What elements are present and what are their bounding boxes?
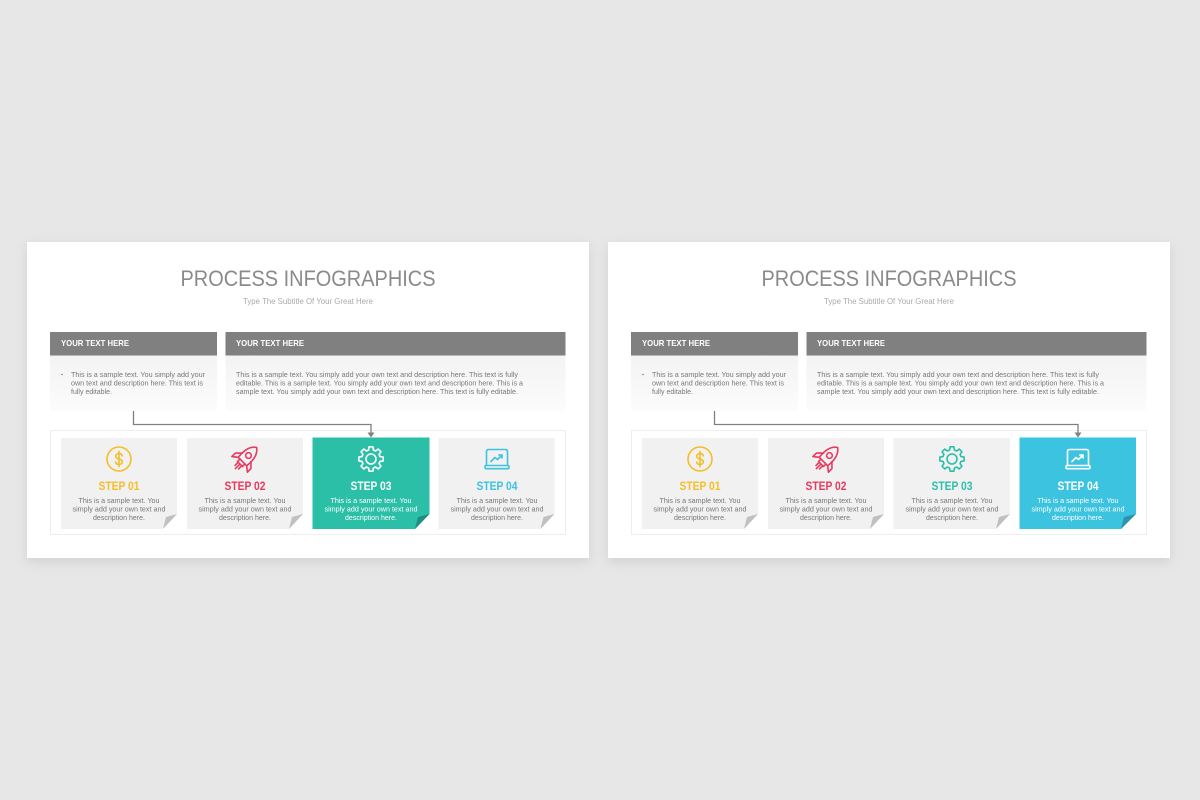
slide 1 left text box: own text and description here. This text is [71, 378, 203, 388]
slide 2 right text box: editable. This is a sample text. You simply add your own text and description here. This is a [817, 378, 1105, 388]
slide 2 right text box [806, 332, 1146, 411]
slide 1 background card [27, 242, 589, 558]
slide 1 step 03 card, highlighted: This is a sample text. You [330, 496, 412, 505]
icon: gear [940, 447, 964, 471]
slide 1 step 01 card: simply add your own text and [72, 504, 166, 514]
slide 1 connector arrow [134, 411, 374, 438]
slide 1 right text box: YOUR TEXT HERE [236, 338, 304, 348]
slide 1 steps frame [50, 430, 566, 534]
slide 2 step 03 card: This is a sample text. You [912, 496, 992, 505]
slide 2 step 02 card: simply add your own text and [780, 504, 872, 514]
slide 1 step 03 card, highlighted [312, 438, 430, 529]
slide 2 step 04 card, highlighted: This is a sample text. You [1038, 496, 1118, 505]
slide 1 subtitle: Type The Subtitle Of Your Great Here [243, 296, 373, 306]
slide 2 step 03 card: simply add your own text and [906, 504, 998, 514]
slide 2 step 04 card, highlighted: STEP 04 [1058, 481, 1099, 493]
slide 2 left text box: own text and description here. This text is [652, 378, 784, 388]
slide 1 step 01 card [61, 438, 177, 529]
slide 1 step 02 card: simply add your own text and [198, 504, 292, 514]
icon: dollar coin [107, 447, 131, 471]
slide 2 step 04 card, highlighted [1020, 438, 1136, 529]
slide 2 step 03 card [894, 438, 1010, 529]
slide 2 step 01 card: STEP 01 [680, 481, 721, 493]
slide 2 right text box: This is a sample text. You simply add your own text and description here. This text is fully [817, 370, 1099, 379]
icon: gear [359, 447, 383, 471]
slide 2 step 01 card [642, 438, 758, 529]
icon: rocket [809, 440, 845, 476]
slide 1 step 01 card: description here. [93, 513, 145, 522]
slide 1 step 04 card: This is a sample text. You [456, 496, 538, 505]
slide 2 left text box: This is a sample text. You simply add your [652, 370, 787, 379]
slide 2 background card [608, 242, 1170, 558]
slide 1 step 04 card [438, 438, 554, 529]
slide 2 step 01 card: This is a sample text. You [660, 496, 740, 505]
icon: dollar coin [688, 447, 712, 471]
slide 2 right text box: sample text. You simply add your own text and description here. This text is fully editable. [817, 387, 1099, 396]
slide 2 step 01 card: simply add your own text and [654, 504, 746, 514]
slide 1 right text box [226, 332, 566, 411]
slide 2 step 04 card, highlighted: simply add your own text and [1032, 504, 1124, 514]
slide 2 right text box: YOUR TEXT HERE [817, 338, 885, 348]
slide 2 step 02 card: STEP 02 [806, 481, 846, 493]
slide 2 steps frame [632, 430, 1146, 534]
icon: laptop with chart [485, 450, 509, 469]
slide 1 left text box: fully editable. [71, 387, 112, 396]
slide 1 step 01 card: This is a sample text. You [78, 496, 160, 505]
slide 1 left text box: This is a sample text. You simply add your [71, 370, 206, 379]
slide 2 left text box: YOUR TEXT HERE [642, 338, 710, 348]
slide 2 left text box: fully editable. [652, 387, 693, 396]
slide 1 step 04 card: STEP 04 [476, 481, 518, 493]
slide 1 step 02 card [187, 438, 303, 529]
slide 1 step 04 card: description here. [471, 513, 523, 522]
slide 1 step 03 card, highlighted: simply add your own text and [324, 504, 418, 514]
slide 2 subtitle: Type The Subtitle Of Your Great Here [824, 296, 954, 306]
slide 1 left text box [50, 332, 217, 411]
slide 1 step 02 card: description here. [219, 513, 271, 522]
slide 2 step 03 card: description here. [926, 513, 978, 522]
slide 1 step 03 card, highlighted: STEP 03 [350, 481, 392, 493]
slide 2 step 02 card: This is a sample text. You [786, 496, 866, 505]
slide 2 connector arrow [714, 411, 1082, 438]
slide 1 step 04 card: simply add your own text and [450, 504, 544, 514]
slide 1 step 03 card, highlighted: description here. [345, 513, 397, 522]
slide 2 step 02 card: description here. [800, 513, 852, 522]
slide 2 step 01 card: description here. [674, 513, 726, 522]
slide 2 step 02 card [768, 438, 884, 529]
slide 2 step 03 card: STEP 03 [932, 481, 972, 493]
slide 2 title: PROCESS INFOGRAPHICS [762, 266, 1016, 291]
slide 1 step 02 card: STEP 02 [224, 481, 266, 493]
slide 1 right text box: sample text. You simply add your own text and description here. This text is fully editable. [236, 387, 518, 396]
icon: laptop with chart [1066, 450, 1090, 469]
slide 1 right text box: This is a sample text. You simply add your own text and description here. This text is fully [236, 370, 518, 379]
slide 2 step 04 card, highlighted: description here. [1052, 513, 1104, 522]
slide 1 right text box: editable. This is a sample text. You simply add your own text and description here. This is a [236, 378, 524, 388]
slide 2 left text box [631, 332, 798, 411]
slide 1 step 01 card: STEP 01 [98, 481, 140, 493]
slide 1 left text box: YOUR TEXT HERE [61, 338, 129, 348]
icon: rocket [228, 440, 264, 476]
slide 1 step 02 card: This is a sample text. You [204, 496, 286, 505]
panel: slide 2, step 04 highlighted [608, 242, 1170, 558]
panel: slide 1, step 03 highlighted [27, 242, 589, 558]
slide 1 title: PROCESS INFOGRAPHICS [180, 266, 436, 291]
